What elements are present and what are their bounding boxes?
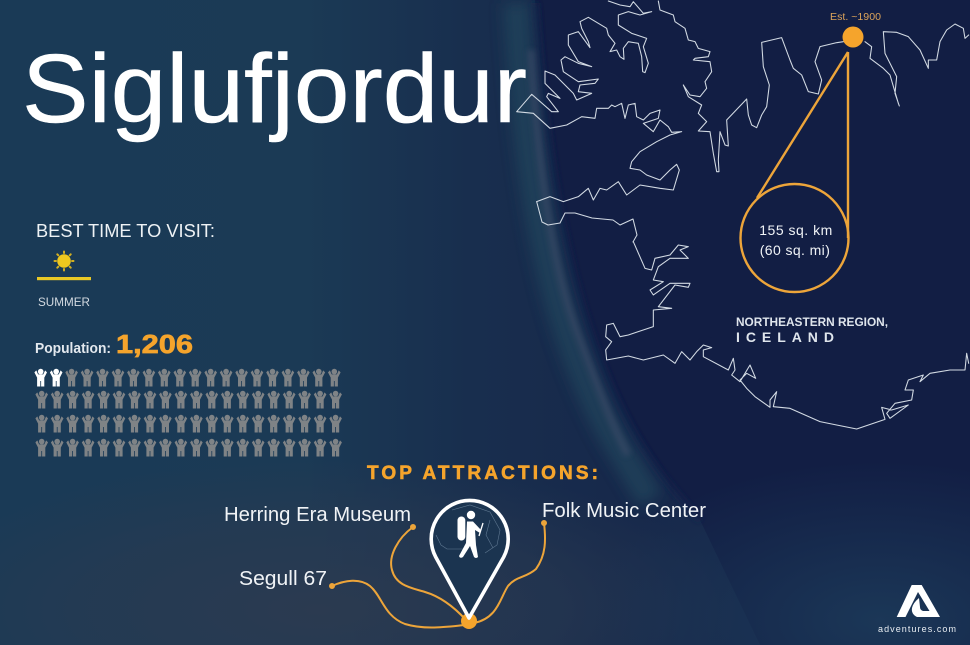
pictogram: population people — [34, 369, 342, 456]
population label: Population: — [35, 340, 111, 357]
population number: 1,206 — [116, 329, 193, 359]
title: Siglufjordur — [22, 34, 527, 143]
region label — [736, 317, 888, 345]
logo: adventures.com — [878, 585, 957, 634]
attraction labels: Herring Era Museum — [224, 504, 411, 526]
attraction labels — [224, 500, 706, 590]
heading: best time to visit: BEST TIME TO VISIT: — [36, 221, 215, 241]
logo: adventures.com: adventures.com — [878, 624, 957, 634]
icon: map pin with hiker — [431, 500, 508, 629]
attraction labels: Folk Music Center — [542, 500, 706, 522]
zoom callout: town marker and area circle — [740, 26, 864, 292]
area text: (60 sq. mi) — [760, 242, 830, 258]
area text: 155 sq. km — [759, 222, 833, 238]
region label: NORTHEASTERN REGION, — [736, 317, 888, 329]
region label: ICELAND — [736, 329, 834, 345]
area text — [759, 222, 833, 258]
label: established date: Est. ~1900 — [830, 11, 881, 23]
label: summer: SUMMER — [38, 295, 90, 309]
attraction labels: Segull 67 — [239, 568, 327, 590]
summer season bar — [37, 277, 91, 280]
icon: sun — [54, 252, 74, 270]
attraction routes — [330, 521, 546, 628]
heading: top attractions: TOP ATTRACTIONS: — [367, 463, 598, 484]
map: northeastern Iceland coastline — [517, 1, 969, 429]
